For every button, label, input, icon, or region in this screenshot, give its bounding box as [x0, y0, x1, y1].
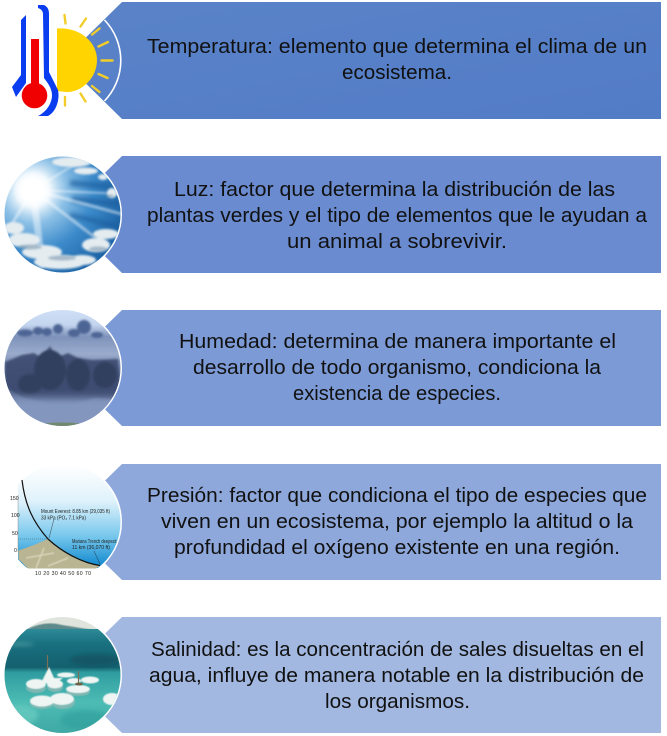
- panel text: Salinidad: es la concentración de sales disueltas en el: [151, 638, 644, 661]
- panel: luz: [4, 156, 661, 273]
- chart: pressure versus altitude: 50: [12, 531, 18, 537]
- chart: pressure versus altitude: [10, 474, 122, 575]
- mountain: [18, 539, 100, 568]
- photo: sunlit sky: [4, 156, 122, 272]
- icon: thermometer: [12, 5, 59, 116]
- chart: pressure versus altitude: Mount Everest: 8.85 km (29,035 ft): [41, 509, 110, 515]
- panel: salinidad: [0, 616, 661, 736]
- panel text: desarrollo de todo organismo, condiciona la: [193, 356, 602, 379]
- panel background: [62, 464, 661, 580]
- chart: pressure versus altitude: 10 20 30 40 50 60 70: [35, 571, 91, 577]
- chart: pressure versus altitude: 0: [14, 548, 17, 554]
- panel text: ecosistema.: [342, 61, 452, 84]
- panel text: los organismos.: [325, 690, 470, 713]
- panel text: [147, 35, 647, 84]
- panel text: Temperatura: elemento que determina el clima de un: [147, 35, 647, 58]
- panel: temperatura: [12, 2, 661, 119]
- panel background: [62, 310, 661, 426]
- panel: humedad: [0, 308, 661, 428]
- panel text: [179, 330, 616, 405]
- panel background: [62, 617, 661, 733]
- panel text: viven en un ecosistema, por ejemplo la altitud o la: [161, 510, 634, 533]
- panel background: [62, 2, 661, 119]
- panel text: [147, 484, 647, 559]
- icon: sun: [57, 15, 112, 106]
- panel text: existencia de especies.: [293, 382, 501, 405]
- panel text: [149, 638, 644, 713]
- panel text: un animal a sobrevivir.: [287, 230, 507, 253]
- panel: presión: [3, 462, 661, 582]
- panel text: Humedad: determina de manera importante el: [179, 330, 616, 353]
- panel text: profundidad el oxígeno existente en una región.: [174, 536, 620, 559]
- chart: pressure versus altitude: 150: [10, 496, 19, 502]
- photo: misty forest: [0, 308, 125, 428]
- chart: pressure versus altitude: Mariana Trench deepest:: [72, 539, 117, 545]
- panel text: plantas verdes y el tipo de elementos que le ayudan a: [147, 204, 648, 227]
- panel text: Presión: factor que condiciona el tipo de especies que: [147, 484, 647, 507]
- panel text: [147, 178, 648, 253]
- chart: pressure versus altitude: 11 km (36,070 ft): [72, 545, 110, 551]
- chart: pressure versus altitude: 100: [11, 513, 20, 519]
- panel background: [62, 156, 661, 273]
- chart: pressure versus altitude: 33 kPa (PO₂ 7.1 kPa): [41, 516, 86, 522]
- panel text: Luz: factor que determina la distribución de las: [174, 178, 615, 201]
- pressure curve: [22, 480, 100, 566]
- white arc: [104, 20, 121, 101]
- panel text: agua, influye de manera notable en la distribución de: [149, 664, 644, 687]
- photo: salt formations in the sea: [0, 616, 125, 736]
